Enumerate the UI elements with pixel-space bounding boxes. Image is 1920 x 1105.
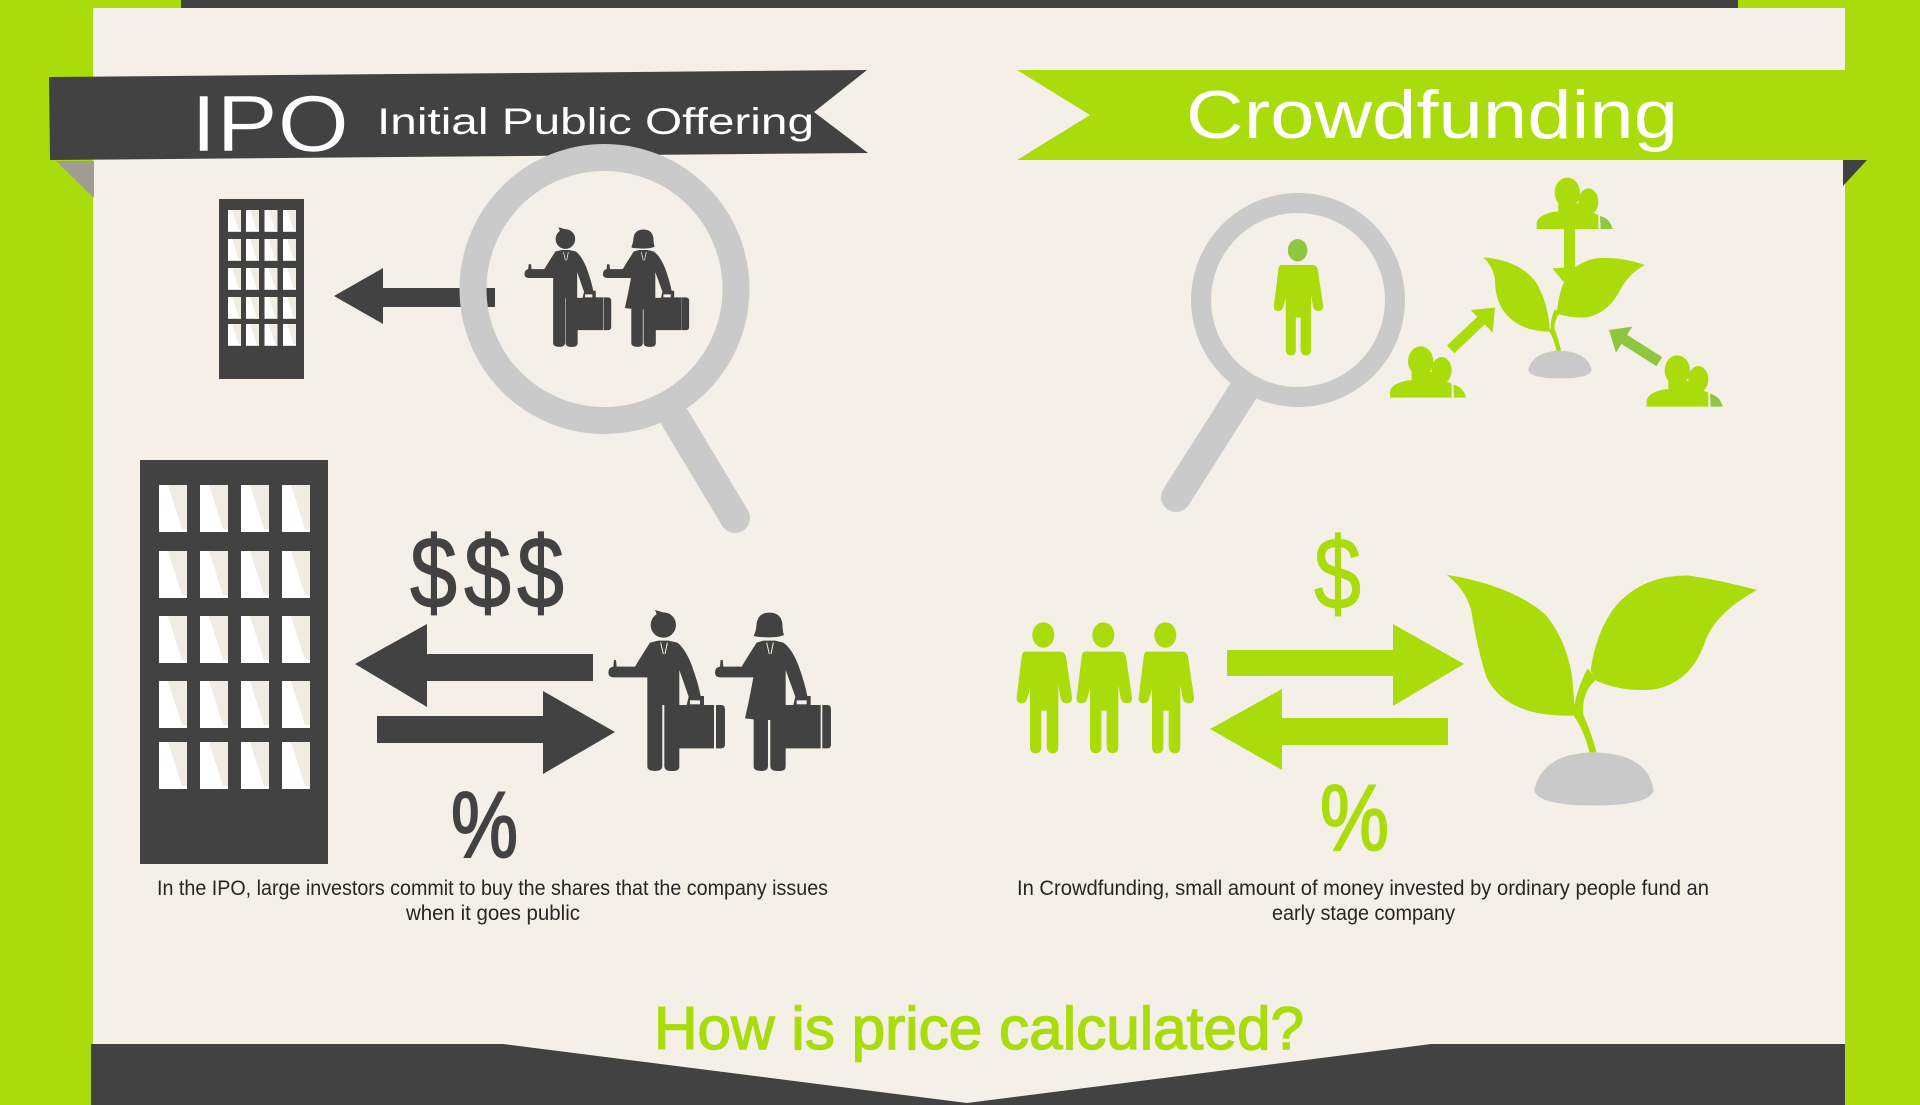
- arrow: left investors to plant: [1451, 308, 1495, 349]
- icon: large investors: [608, 610, 831, 771]
- subheading: Initial Public Offering: Initial Public Offering: [377, 101, 814, 142]
- caption: Crowdfunding: In Crowdfunding, small amount of money invested by ordinary people fund an: [1017, 877, 1709, 900]
- caption: Crowdfunding: [1017, 877, 1709, 925]
- icon: three people: [1017, 622, 1194, 753]
- icon: single person: [1274, 239, 1323, 355]
- Crowdfunding ribbon banner: [1017, 70, 1846, 160]
- arrow: shares to investors: [377, 691, 615, 774]
- arrow: returns to investors: [1210, 689, 1448, 770]
- label: dollars: $: [517, 516, 564, 630]
- icon: top investors: [1537, 178, 1613, 229]
- icon: magnifying glass: [1176, 203, 1395, 497]
- caption: Crowdfunding: early stage company: [1272, 902, 1455, 925]
- label: dollars: $: [464, 516, 511, 630]
- icon: magnifying glass: [473, 158, 736, 518]
- arrow: top down: [1552, 229, 1580, 282]
- icon: right investors: [1647, 355, 1723, 407]
- heading: How is price calculated?: How is price calculated?: [654, 995, 1304, 1062]
- panel: Crowdfunding: [1017, 70, 1867, 925]
- icon: small plant: [1483, 257, 1645, 378]
- arrow: investors to company (small): [334, 268, 495, 324]
- arrow: right investors to plant: [1609, 327, 1659, 362]
- label: percent: %: [1320, 765, 1389, 870]
- label: percent: %: [451, 772, 518, 877]
- panel: IPO: [49, 70, 868, 925]
- label: dollars: $: [410, 516, 457, 630]
- heading: IPO: IPO: [191, 79, 349, 168]
- icon: large plant: [1447, 575, 1757, 806]
- arrow: money to company: [355, 624, 593, 707]
- heading: Crowdfunding: Crowdfunding: [1186, 77, 1678, 153]
- IPO ribbon fold: [56, 161, 94, 198]
- footer dark chevron band: [91, 1044, 1845, 1105]
- caption: IPO: In the IPO, large investors commit to buy the shares that the company issues: [157, 877, 828, 900]
- label: dollars: [410, 516, 564, 630]
- arrow: money to company: [1227, 624, 1464, 706]
- caption: IPO: when it goes public: [405, 902, 580, 925]
- top dark bar: [181, 0, 1738, 8]
- Crowdfunding ribbon fold: [1843, 160, 1867, 186]
- caption: IPO: [157, 877, 828, 925]
- icon: small building: [219, 199, 304, 379]
- icon: large building: [140, 460, 328, 864]
- IPO ribbon banner: [49, 70, 868, 160]
- icon: small plant with investors: [1390, 178, 1723, 407]
- icon: left investors: [1390, 346, 1466, 398]
- icon: small investors: [525, 228, 689, 346]
- label: dollar: $: [1314, 517, 1361, 631]
